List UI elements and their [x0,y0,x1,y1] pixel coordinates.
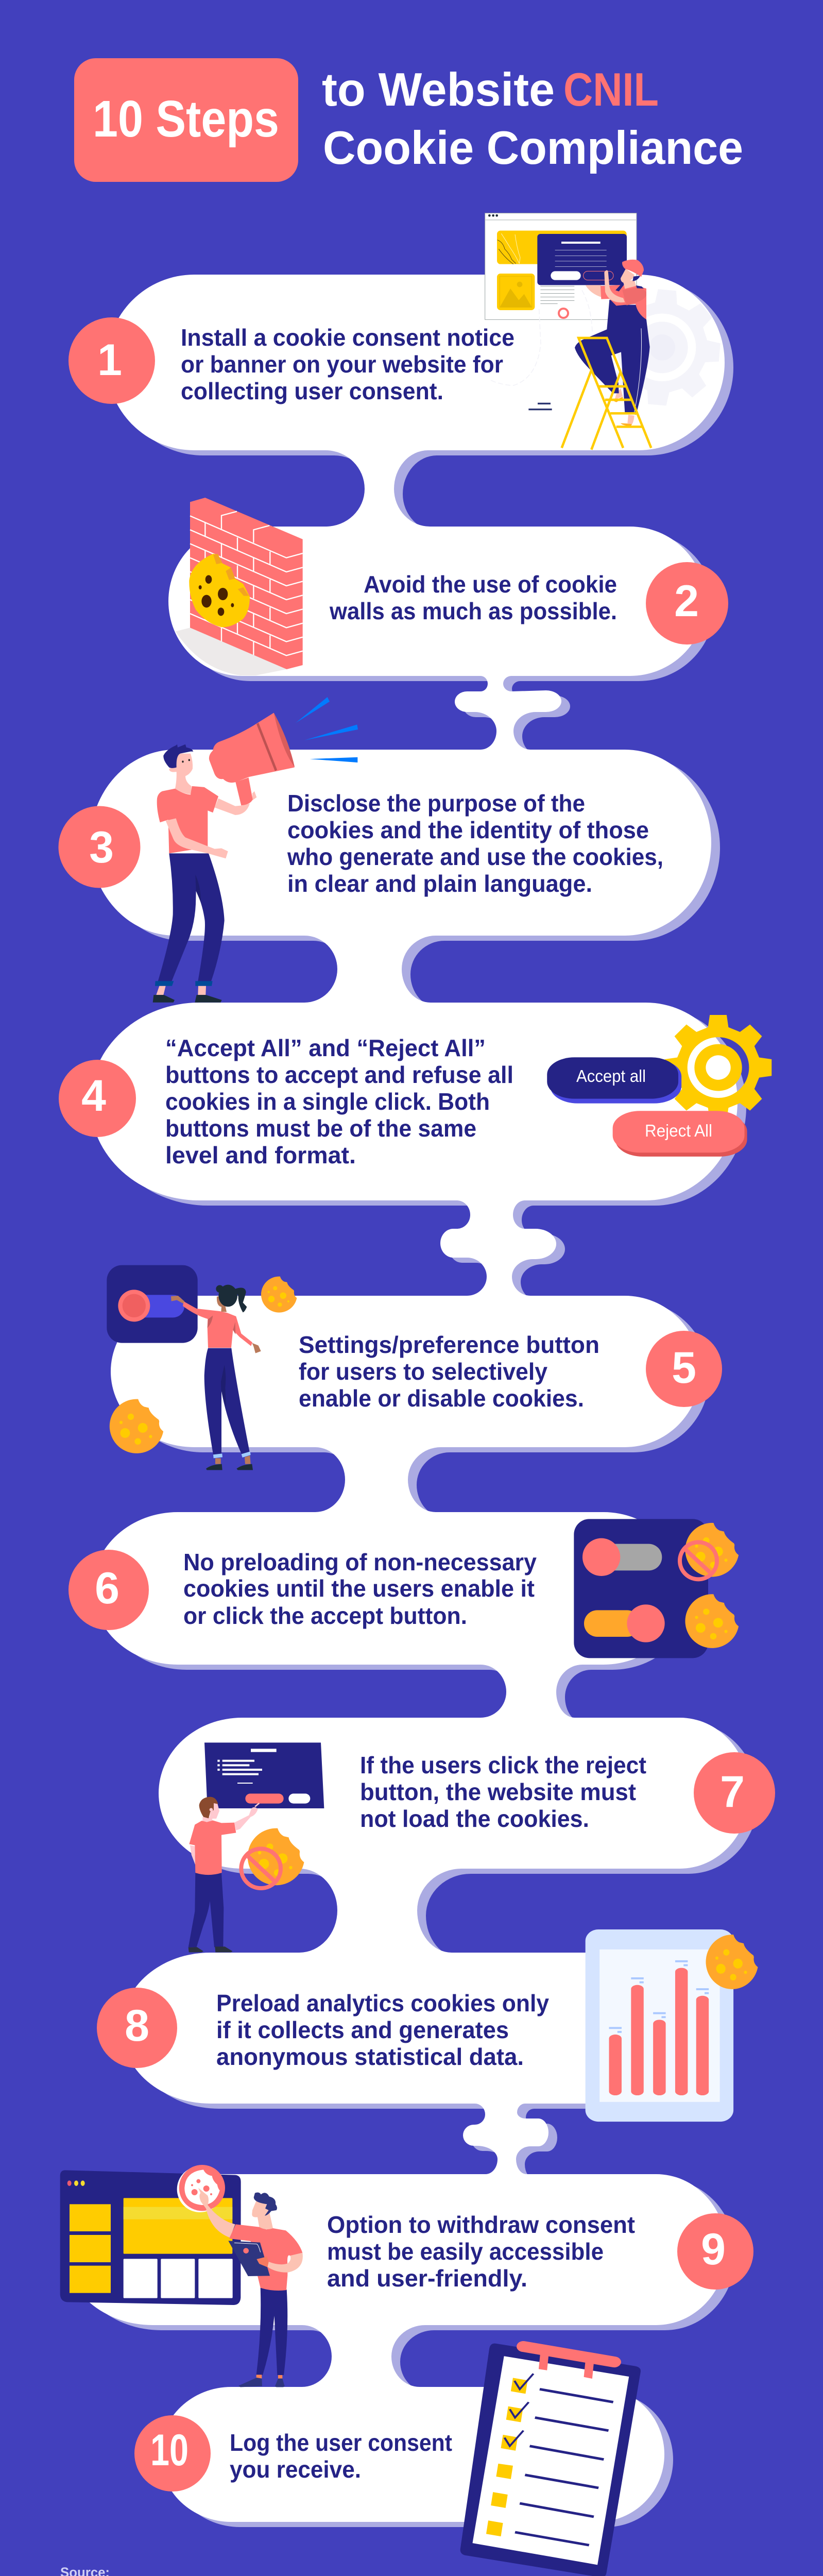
panel: step 6 [68,1519,739,1658]
icon: browser panel and man with tablet [60,2165,303,2387]
text: step 10: Log the user consent [230,2429,452,2456]
text: step 3 [287,790,663,897]
text: step 4 [165,1035,513,1168]
title text: Cookie Compliance [323,122,743,174]
text: step 6: or click the accept button. [183,1602,467,1629]
text: step 4: level and format. [165,1142,356,1168]
text: step 9 [327,2211,635,2292]
icon: analytics tablet with bar chart [586,1929,758,2122]
title badge: 10 Steps [74,58,298,182]
text: step 9: and user-friendly. [327,2265,527,2292]
panel: step 5 [107,1265,722,1470]
text: step 1 [181,324,515,404]
badge: 8 [97,1988,177,2068]
text: step 9: Option to withdraw consent [327,2211,635,2238]
title [74,58,743,182]
icon: man at reject screen with blocked cookie [188,1742,324,1952]
badge: 1: 1 [97,335,122,385]
icon: checklist clipboard [460,2344,641,2576]
badge: 5: 5 [672,1343,696,1393]
text: step 8: if it collects and generates [216,2016,509,2043]
text: step 1: collecting user consent. [181,378,443,404]
text: step 9: must be easily accessible [327,2238,604,2265]
badge: 8: 8 [125,2001,149,2050]
text: step 8 [216,1990,549,2070]
icon: woman with toggle and cookies [107,1265,297,1470]
panel: step 10 [134,2344,641,2576]
icon: brick wall with cookie [176,498,303,675]
panel: step 9 [60,2165,753,2387]
text: step 10 [230,2429,452,2483]
icon: toggle card with cookies [574,1519,739,1658]
text: step 8: anonymous statistical data. [216,2043,524,2070]
text: step 4: buttons to accept and refuse all [165,1061,513,1088]
badge: 5 [646,1331,722,1407]
icon: man with megaphone [153,697,358,1003]
panel: step 7 [188,1742,775,1952]
text: step 3: cookies and the identity of those [287,817,649,843]
panel: step 4 [59,1015,771,1168]
text: step 5: enable or disable cookies. [299,1385,584,1412]
badge: 2: 2 [674,577,699,626]
title text [322,64,743,174]
text: step 1: Install a cookie consent notice [181,324,515,351]
badge: 9: 9 [701,2225,726,2274]
text: step 1: or banner on your website for [181,351,503,378]
text: step 2: walls as much as possible. [329,598,617,624]
icon: gear with accept and reject buttons [547,1015,771,1157]
badge: 10: 10 [150,2426,188,2475]
text: step 8: Preload analytics cookies only [216,1990,549,2016]
badge: 4 [59,1060,136,1137]
text: step 7: not load the cookies. [360,1805,589,1832]
text: step 6 [183,1549,537,1629]
badge: 4: 4 [81,1071,106,1121]
text: step 7: If the users click the reject [360,1752,646,1778]
panel: step 8 [97,1929,758,2122]
text: step 4: “Accept All” and “Reject All” [165,1035,486,1061]
panel: step 3 [59,697,663,1003]
title badge: 10 Steps: 10 Steps [93,90,279,148]
badge: 3 [59,806,140,888]
badge: 3: 3 [89,823,114,872]
text: step 2: Avoid the use of cookie [364,571,617,598]
panel: step 1 [68,213,725,450]
text: step 3: in clear and plain language. [287,870,592,897]
text: step 3: who generate and use the cookies, [287,843,663,870]
badge: 9 [677,2213,753,2290]
text: step 6: No preloading of non-necessary [183,1549,537,1575]
badge: 7: 7 [720,1767,745,1817]
text: step 4: cookies in a single click. Both [165,1088,490,1115]
text: step 5 [299,1331,599,1412]
text: step 10: you receive. [230,2456,361,2483]
badge: 1 [68,317,155,404]
winding path shape [64,275,749,2522]
text: step 6: cookies until the users enable it [183,1575,535,1602]
button label: Accept all: Accept all [576,1066,646,1086]
button label: Reject All: Reject All [645,1121,712,1140]
text: step 5: for users to selectively [299,1358,547,1385]
text: step 4: buttons must be of the same [165,1115,476,1142]
badge: 2 [646,562,728,645]
panel: step 2 [176,498,728,675]
icon: website window with person on ladder [485,213,725,450]
text: step 7: button, the website must [360,1778,636,1805]
text: step 5: Settings/preference button [299,1331,599,1358]
badge: 6 [68,1550,149,1630]
text: step 7 [360,1752,646,1832]
badge: 10 [134,2415,211,2492]
badge: 6: 6 [95,1564,119,1613]
badge: 7 [694,1752,775,1834]
title text: to Website [322,64,555,116]
text: step 2 [329,571,617,624]
title text: CNIL [563,64,659,116]
winding path shape shadow [73,280,758,2527]
text: step 3: Disclose the purpose of the [287,790,585,817]
